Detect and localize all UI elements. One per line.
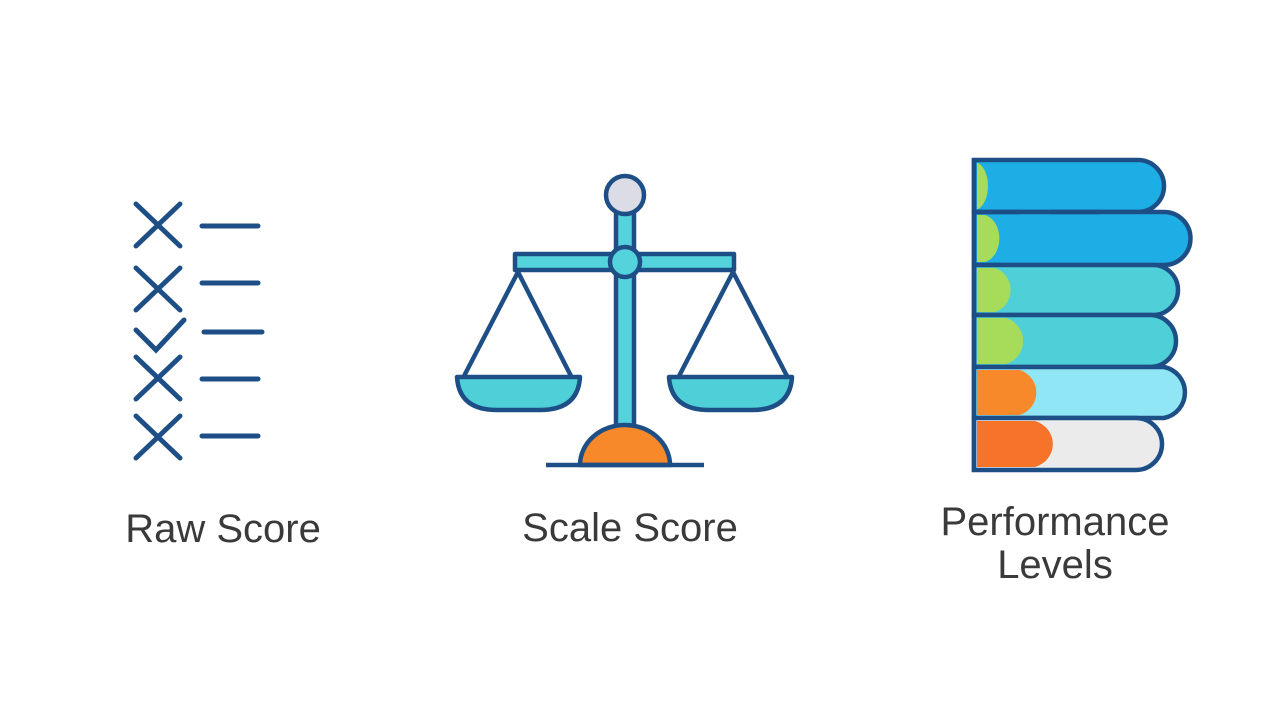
label: performance levels [940,500,1169,587]
label: raw score: Raw Score [125,507,321,551]
label: performance levels: Levels [997,543,1113,587]
label: performance levels: Performance [940,500,1169,544]
label: scale score: Scale Score [522,506,738,550]
